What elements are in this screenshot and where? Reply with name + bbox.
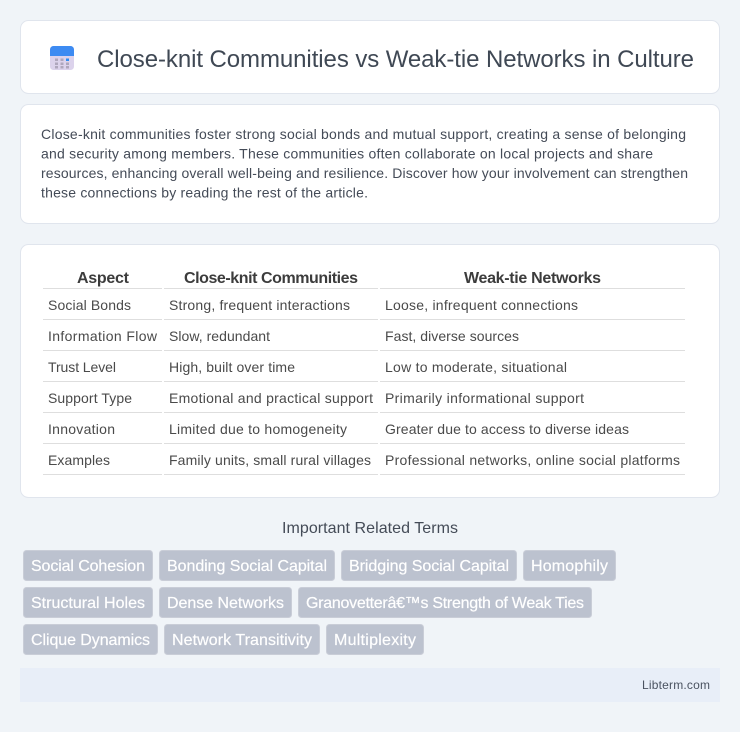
row: trust level: Low to moderate, situational [385,359,567,375]
intro paragraph: and security among members. These communities often collaborate on local projects and share [41,146,653,162]
tag: dense networks: Dense Networks [167,595,284,612]
row: social bonds: Strong, frequent interactions [169,297,350,313]
row: support type [48,390,584,406]
intro paragraph: Close-knit communities foster strong social bonds and mutual support, creating a sense of belonging [41,126,686,142]
row: information flow: Information Flow [48,328,158,344]
tag: clique dynamics [24,624,158,654]
tag: granovetter: Granovetterâ€™s Strength of Weak Ties [306,595,584,612]
row: examples: Examples [48,452,110,468]
tag: multiplexity: Multiplexity [334,632,416,649]
tag: structural holes: Structural Holes [31,595,145,612]
table header: Close-knit Communities [184,270,358,287]
tag: structural holes [24,588,152,618]
row: support type: Emotional and practical support [169,390,373,406]
row: innovation: Greater due to access to diverse ideas [385,421,629,437]
table header: Weak-tie Networks [464,270,601,287]
intro paragraph: resources, enhancing overall well-being and resilience. Discover how your involvement can strengthen [41,165,688,181]
row: information flow: Slow, redundant [169,328,270,344]
tag: dense networks [160,588,292,618]
title: Close-knit Communities vs Weak-tie Networks in Culture [97,46,694,73]
tag: social cohesion: Social Cohesion [31,558,145,575]
row: trust level: Trust Level [48,359,116,375]
row: examples: Professional networks, online social platforms [385,452,680,468]
tag: bridging social capital: Bridging Social Capital [349,558,509,575]
tag: homophily [524,550,616,580]
tag: bonding social capital: Bonding Social Capital [167,558,327,575]
tag: network transitivity: Network Transitivity [172,632,312,649]
tag: bonding social capital [160,550,334,580]
row: examples: Family units, small rural villages [169,452,371,468]
row: social bonds [48,297,578,313]
row: trust level [48,359,567,375]
intro paragraph [41,126,688,200]
row: support type: Support Type [48,390,132,406]
tag: homophily: Homophily [531,558,608,575]
panel: intro text card [20,104,720,224]
panel: header card [20,20,720,94]
table header [77,270,601,287]
row: information flow: Fast, diverse sources [385,328,519,344]
row: innovation: Limited due to homogeneity [169,421,347,437]
heading: important related terms: Important Related Terms [282,520,458,537]
tag: clique dynamics: Clique Dynamics [31,632,150,649]
tag: bridging social capital [342,550,516,580]
tag: social cohesion [24,550,152,580]
footer bar [20,668,720,702]
row: social bonds: Loose, infrequent connections [385,297,578,313]
panel: comparison table card [20,244,720,498]
table header: Aspect [77,270,130,287]
row: trust level: High, built over time [169,359,295,375]
intro paragraph: these connections by reading the rest of the article. [41,184,368,200]
row: social bonds: Social Bonds [48,297,131,313]
row: examples [48,452,680,468]
row: innovation: Innovation [48,421,115,437]
tag: multiplexity [326,624,424,654]
row: information flow [48,328,519,344]
tag: network transitivity [164,624,320,654]
row: support type: Primarily informational support [385,390,584,406]
footer source label: Libterm.com [642,678,710,692]
row: innovation [48,421,629,437]
tag: granovetter [298,588,592,618]
icon: calendar [50,46,74,70]
related term tags [24,550,616,654]
